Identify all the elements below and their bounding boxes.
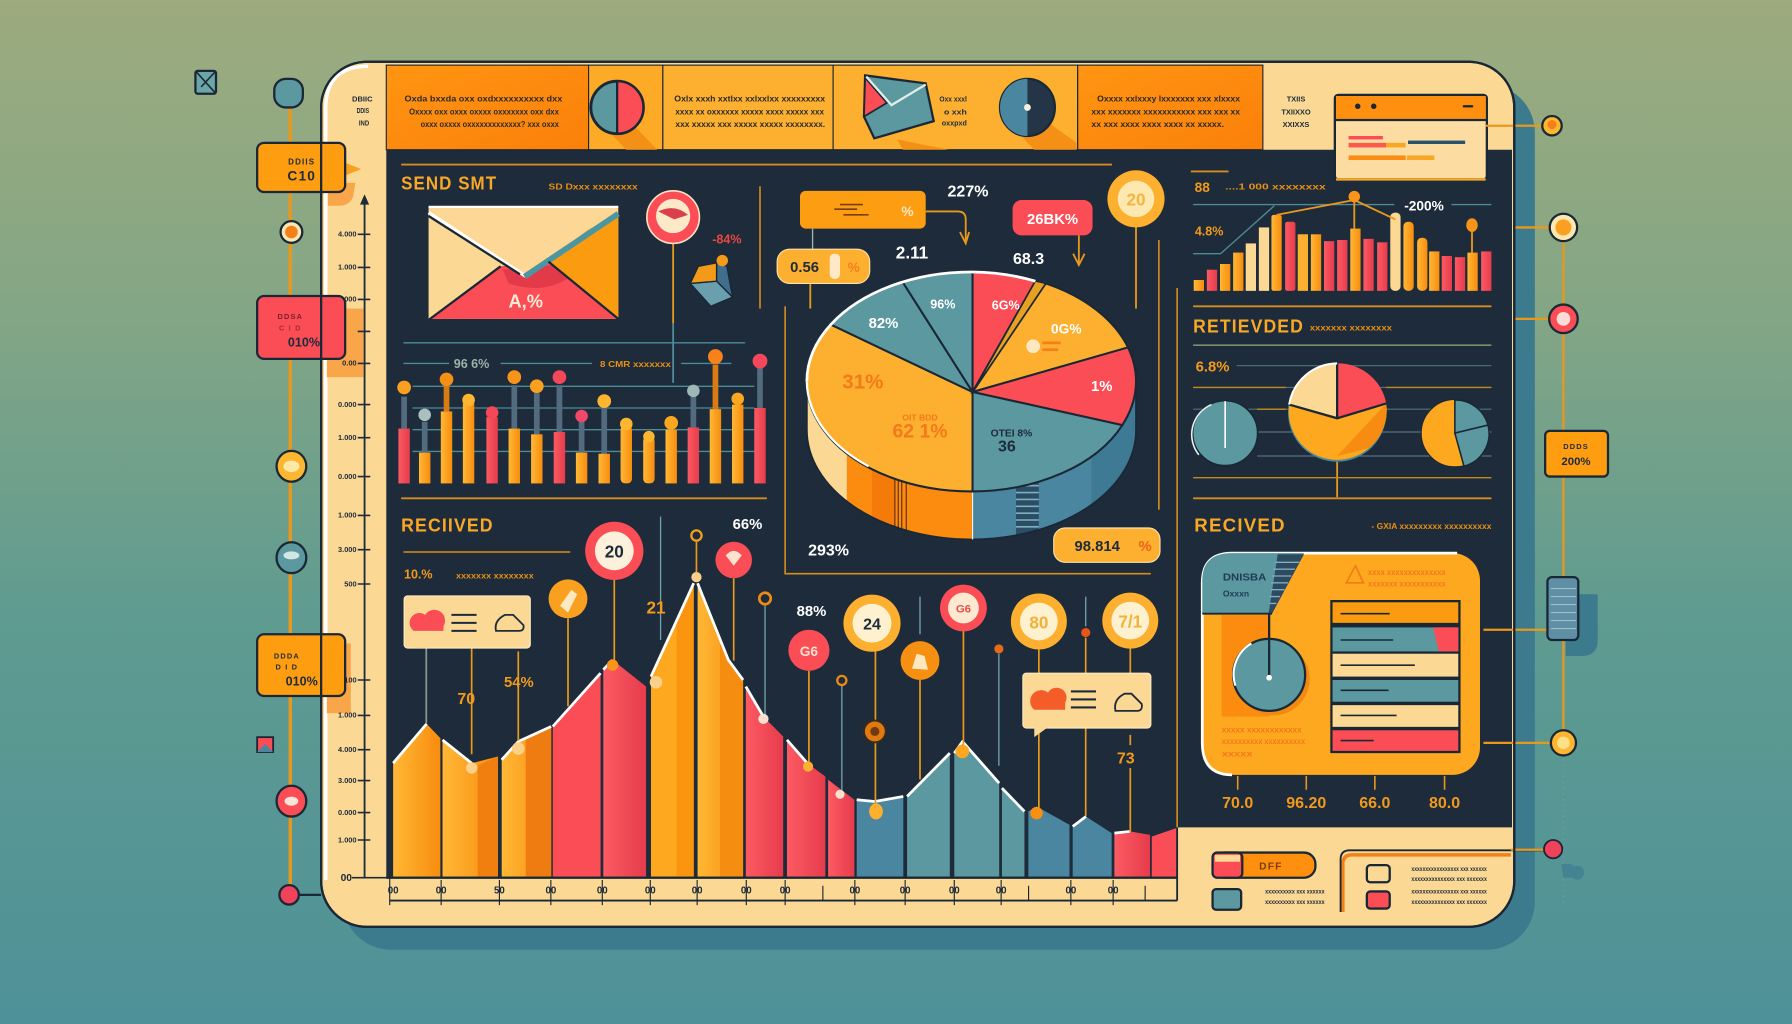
folder axis labels: 66.0	[1359, 795, 1391, 812]
area columns	[393, 583, 1176, 877]
frame lines	[785, 240, 1177, 827]
left value axis: 500	[344, 579, 357, 588]
arrow: red pill down	[1073, 235, 1085, 265]
label: 68.3: 68.3	[1013, 251, 1044, 268]
chart value labels	[457, 517, 1135, 767]
header cell: yellow text	[663, 65, 833, 150]
main panel	[321, 62, 1514, 927]
folder note	[1346, 566, 1446, 588]
label: 2.11: 2.11	[896, 242, 929, 262]
pin: small ring top	[691, 530, 702, 582]
pill: lower value: 98.814	[1074, 539, 1121, 555]
x axis: 00	[545, 886, 556, 897]
section: retrieved	[1192, 316, 1491, 498]
x axis: 00	[436, 886, 447, 897]
folder list	[1331, 601, 1459, 752]
heading: received left: RECIIVED	[401, 514, 494, 535]
callout: red	[257, 296, 345, 359]
panel shadow	[343, 85, 1535, 950]
header strip	[352, 65, 1311, 150]
chart value labels: 88%	[797, 604, 826, 620]
panel left highlight	[326, 66, 368, 880]
guide lines	[1193, 366, 1491, 456]
x axis: 00	[849, 886, 860, 897]
pin: red 20: 20	[605, 542, 624, 562]
header strip: IND	[359, 119, 370, 128]
left value axis: 1.000	[338, 711, 357, 720]
pin: orange 2	[901, 641, 939, 680]
header cell: envelope and disc: oxxpxd	[942, 119, 967, 128]
label: 293%: 293%	[808, 542, 849, 559]
callout: orange top: C10	[287, 169, 316, 184]
callout: orange lower: 010%	[286, 675, 318, 689]
pie labels: 1%	[1091, 379, 1112, 395]
pie labels: 36	[998, 438, 1016, 455]
pin: small dot	[994, 644, 1003, 653]
callout: orange tag: %	[901, 204, 914, 219]
folder footnote: xxxxxxxxxx xxxxxxxxxx	[1222, 736, 1305, 746]
label: negative percent: -84%	[712, 232, 742, 246]
pie labels	[842, 298, 1112, 455]
header cell: orange text	[386, 65, 589, 150]
left value axis: 0.000	[338, 472, 357, 481]
pin: small ring	[835, 676, 846, 799]
node: yellow	[277, 451, 306, 482]
folder tab: Oxxxn	[1223, 590, 1249, 599]
x axis: 00	[900, 886, 911, 897]
header cell: right note: TXIIS	[1287, 95, 1305, 104]
pie labels: 31%	[842, 371, 883, 394]
label: 4.8%: 4.8%	[1195, 224, 1223, 238]
slice: red upper	[973, 272, 1035, 392]
header cell: orange text: Oxda bxxda oxx oxdxxxxxxxxxx dxx	[405, 94, 563, 104]
left value axis: 00	[341, 873, 352, 884]
section: right top bars	[1191, 171, 1491, 306]
x axis: 00	[996, 886, 1007, 897]
folder axis labels	[1222, 776, 1460, 812]
folder tab: DNISBA	[1223, 573, 1267, 584]
legend	[1213, 840, 1562, 912]
left timeline	[257, 79, 361, 905]
dark dashboard area	[386, 150, 1512, 878]
pin: small ring mid	[758, 593, 771, 724]
header cell: orange text right: Oxxxx xxlxxxy lxxxxxxx xxx xlxxxx	[1097, 94, 1240, 104]
tag: left note	[404, 596, 530, 648]
balls on peaks	[466, 659, 662, 774]
callout: orange right: 200%	[1561, 456, 1591, 468]
label: 227%: 227%	[948, 184, 988, 201]
legend toggle	[1213, 853, 1315, 878]
folder footnote	[1222, 725, 1305, 759]
callout: orange lower: D I D	[276, 663, 298, 672]
callout: red: C I D	[279, 323, 302, 332]
callout: orange top: DDIIS	[288, 158, 315, 167]
chart value labels: 73	[1117, 750, 1135, 767]
callout: red pill	[1013, 200, 1093, 235]
left value axis: 1.000	[338, 263, 357, 272]
pin: red badge	[647, 191, 699, 383]
label: 6.8%: 6.8%	[1196, 359, 1229, 375]
caption: SD Dxxx xxxxxxxx	[549, 182, 638, 192]
left value axis: 3.000	[338, 545, 357, 554]
small pie: blue	[1192, 401, 1258, 466]
pill: lower value: %	[1139, 539, 1152, 555]
pin: yellow 80: 80	[1029, 613, 1048, 633]
caption: xxxxxxx xxxxxxxx	[456, 570, 534, 580]
callout: orange top	[257, 143, 361, 192]
legend swatch: blue: xxxxxxxxxx xxx xxxxxx	[1265, 889, 1325, 896]
left value axis: 100	[344, 675, 357, 684]
header cell: orange text right: xx xxx xxxx xxxx xxxx xx xxxxx.	[1091, 119, 1224, 129]
header cell: right note: TXIIXXO	[1281, 107, 1311, 116]
header cell: orange text right	[1078, 65, 1263, 150]
x axis: 50	[494, 886, 505, 897]
label: -200%: -200%	[1404, 198, 1444, 213]
arrow: orange elbow	[926, 211, 969, 243]
left value axis: 0.000	[338, 400, 357, 409]
pie chart	[800, 272, 1144, 549]
slice: blue left	[831, 282, 973, 392]
callout: red: 010%	[288, 335, 320, 349]
left value axis: 1.000	[338, 433, 357, 442]
badge: yellow circle: 20	[1126, 190, 1146, 210]
guide lines behind bars	[403, 343, 754, 451]
folder footnote: xxxxx xxxxxxxxxxxx	[1222, 725, 1302, 735]
callout: orange right: DDDS	[1563, 442, 1589, 451]
header cell: orange text: Oxxxx oxx oxxx oxxxx oxxxxxxx oxx dxx	[409, 106, 559, 116]
caption: xxxxxxx xxxxxxxx	[1310, 322, 1392, 332]
folder note: xxxxxxx xxxxxxxxxxx	[1368, 578, 1446, 588]
header cell: yellow text: xxx xxxxx xxx xxxxx xxxxx xxxxxxxx.	[675, 119, 825, 129]
icon: cube pin	[690, 255, 733, 306]
pie labels: 0G%	[1051, 322, 1082, 337]
x axis	[386, 827, 1177, 905]
header cell: orange text right: xxx xxxxxxx xxxxxxxxxxx xxx xxx xx	[1091, 106, 1240, 116]
left value axis: 0.000	[338, 295, 357, 304]
pin: yellow 80	[1011, 593, 1067, 819]
heading: retrieved: RETIEVDED	[1193, 316, 1304, 337]
icon: envelope: A,%	[508, 290, 543, 311]
pin: red small	[715, 542, 752, 578]
pin: red 06	[788, 630, 829, 772]
node: top blue	[274, 79, 303, 107]
pin: yellow 74	[1102, 593, 1158, 649]
gauge circle	[1233, 614, 1310, 715]
pin: yellow 74: 7/1	[1118, 611, 1143, 631]
icon: envelope	[429, 207, 618, 320]
x axis: 00	[645, 886, 656, 897]
folder axis labels: 96.20	[1286, 795, 1326, 812]
small pie: right	[1421, 399, 1489, 467]
pin: red 06: G6	[800, 644, 818, 659]
x axis: 00	[1108, 886, 1119, 897]
bar label: 96 6%	[454, 357, 489, 371]
section: received folder	[1194, 514, 1492, 812]
tag: right note	[1023, 673, 1151, 737]
folder tab	[1202, 553, 1304, 614]
header cell: yellow text: xxxx xx oxxxxxx xxxxx xxxx xxxxx xxx	[675, 106, 824, 116]
heading: send: SEND SMT	[401, 173, 497, 194]
header cell: left note: DBIIC	[352, 95, 373, 104]
blob near red node	[1561, 864, 1584, 880]
slice: yellow large	[807, 325, 973, 491]
chart value labels: 54%	[504, 675, 534, 691]
pins and stems	[426, 517, 1158, 832]
header cell: pie icon	[589, 65, 663, 150]
pin: red 3: G6	[956, 604, 971, 616]
node: red large	[277, 786, 306, 817]
pin: yellow 24	[843, 595, 901, 652]
pin: medal	[864, 721, 886, 819]
pie labels: 96%	[930, 298, 955, 312]
node: orange	[281, 221, 302, 243]
legend swatch: cream	[1367, 865, 1487, 883]
callout: orange lower: DDDA	[274, 651, 300, 660]
left value axis: 1.000	[338, 835, 357, 844]
left value axis: 4.000	[338, 745, 357, 754]
chart value labels: 70	[457, 691, 475, 708]
node: red small	[279, 885, 321, 905]
stick bar chart	[397, 349, 767, 483]
chart value labels: 21	[646, 598, 666, 618]
legend swatch: blue: xxxxxxxxxx xxx xxxxxx	[1265, 899, 1325, 906]
callout shadows on panel	[327, 183, 363, 713]
node: orange	[1550, 214, 1577, 241]
x axis: 00	[741, 886, 752, 897]
node: top	[1542, 116, 1562, 135]
right timeline	[1483, 116, 1608, 903]
section: send	[401, 165, 1112, 383]
folder axis labels: 70.0	[1222, 795, 1253, 812]
slice: yellow upper	[973, 283, 1128, 392]
icon: small square lower-left	[257, 737, 273, 752]
x axis: 00	[597, 886, 608, 897]
pie labels: OIT BDD	[902, 413, 938, 423]
folder note: xxxx xxxxxxxxxxxxxx	[1368, 567, 1446, 577]
left value axis: 1.000	[338, 511, 357, 520]
node: yellow bottom	[1551, 730, 1576, 755]
caption above bars: 8 CMR xxxxxxx	[600, 359, 671, 369]
x axis: 00	[1065, 886, 1076, 897]
pin: tiny dot	[1081, 628, 1090, 637]
bars	[1193, 205, 1491, 291]
header cell: envelope and disc: Oxx xxxl	[939, 95, 967, 104]
pie labels: OTEI 8%	[991, 429, 1032, 440]
pie labels: 6G%	[992, 299, 1020, 313]
pie side wall	[808, 397, 1136, 539]
legend bracket	[1341, 840, 1562, 912]
left value axis	[338, 194, 389, 884]
left value axis: 3.000	[338, 776, 357, 785]
chart value labels: 66%	[733, 517, 762, 533]
heading: received: RECIVED	[1194, 514, 1286, 535]
x axis: 00	[388, 886, 399, 897]
header cell: right note	[1281, 95, 1311, 129]
header cell: yellow text: Oxlx xxxh xxtlxx xxlxxlxx xxxxxxxxx	[674, 94, 825, 104]
callout: orange tag	[800, 191, 926, 249]
section: pie	[777, 170, 1177, 827]
label: 88: 88	[1195, 180, 1210, 195]
left value axis: 4.000	[338, 230, 357, 239]
section: received area chart	[386, 514, 1177, 905]
callout: orange right	[1545, 431, 1608, 477]
icon: small square top-left	[195, 71, 216, 94]
left value axis: 0.000	[338, 808, 357, 817]
callout: orange lower	[257, 634, 345, 696]
pill: value: 0.56	[790, 260, 819, 276]
header strip: DDIS	[357, 106, 369, 115]
legend swatch: red: xxxxxxxxxxxxxxxxx xxx xxxxxx	[1411, 889, 1487, 896]
legend toggle: DFF	[1259, 862, 1283, 873]
callout: red: DDSA	[278, 312, 303, 321]
slice: blue lower	[973, 392, 1122, 491]
pin: red 20	[585, 522, 643, 580]
pill: value: %	[848, 260, 860, 275]
panel outline	[321, 62, 1514, 927]
pin: yellow 24: 24	[863, 617, 881, 634]
slice: red right	[973, 347, 1136, 425]
node: red	[1549, 305, 1578, 333]
legend swatch: blue	[1213, 889, 1325, 910]
pill: value	[777, 249, 870, 309]
folder axis labels: 80.0	[1429, 795, 1460, 812]
header cell: envelope and disc: o xxh	[944, 107, 967, 116]
caption: - GXIA xxxxxxxxx xxxxxxxxxx	[1371, 521, 1492, 531]
header cell: envelope and disc	[833, 65, 1078, 150]
pin: red 3	[940, 585, 987, 758]
header cell: right note: XXIXXS	[1283, 120, 1309, 129]
callout: red pill: 26BK%	[1027, 212, 1078, 228]
left value axis: 0.00	[342, 359, 357, 368]
node: blue	[277, 542, 306, 573]
folder card	[1202, 553, 1480, 775]
label: 10%: 10.%	[404, 567, 433, 581]
pie labels: 62 1%	[892, 421, 948, 443]
legend swatch: cream: xxxxxxxxxxxxxxx xxx xxxxxxx	[1411, 876, 1487, 883]
pie labels: 82%	[869, 316, 898, 332]
caption: ....1 000 xxxxxxxx	[1225, 182, 1326, 192]
header cell: orange text: oxxx oxxxx oxxxxxxxxxxxxx? xxx oxxx	[421, 119, 559, 129]
pill: lower value	[1054, 528, 1160, 562]
x axis: 00	[780, 886, 791, 897]
legend swatch: cream: xxxxxxxxxxxxxxxxx xxx xxxxxx	[1411, 866, 1487, 873]
x axis: 00	[949, 886, 960, 897]
small pie: center	[1288, 363, 1387, 497]
icon: browser window	[1335, 95, 1487, 179]
badge: yellow circle	[1107, 170, 1165, 309]
legend swatch: red: xxxxxxxxxxxxxxx xxx xxxxxxx	[1411, 899, 1487, 906]
legend swatch: red	[1367, 889, 1487, 909]
slice: blue upper	[903, 272, 973, 392]
x axis: 00	[692, 886, 703, 897]
folder footnote: xxxxx	[1222, 749, 1253, 759]
trend line	[1277, 191, 1478, 253]
pin: orange badge	[549, 579, 587, 618]
icon: server block	[1547, 577, 1598, 656]
